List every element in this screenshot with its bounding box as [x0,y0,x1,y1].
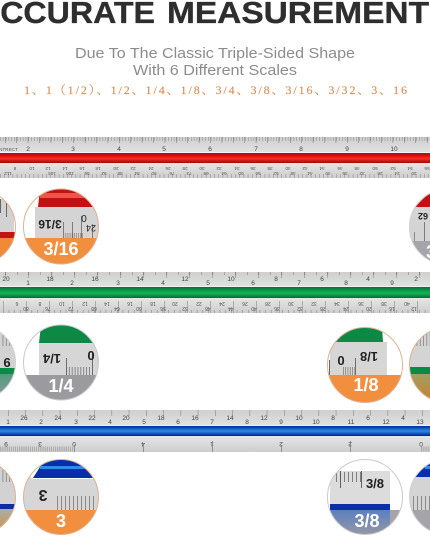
green ruler: 14 [136,276,144,283]
green ruler: 76 [45,305,51,311]
green ruler: 68 [91,305,97,311]
red ruler: 48 [354,166,360,171]
red ruler: 56 [424,166,430,171]
blue ruler: 1 [6,419,10,426]
green ruler: 28 [320,305,326,311]
blue ruler: 12 [382,419,390,426]
green ruler: 44 [228,305,234,311]
red ruler: 18 [95,166,101,171]
magnifier: 1/8 scale: 0 [337,353,345,368]
green ruler: 20 [366,305,372,311]
red ruler: 14 [62,166,68,171]
blue ruler: 6 [176,419,180,426]
red ruler: 104 [48,171,56,176]
green ruler: 20 [172,300,178,306]
red ruler: 44 [307,171,313,176]
red ruler: 16 [79,166,85,171]
red ruler: 10 [29,166,35,171]
magnifier: green partial left: 9 [3,355,11,370]
magnifier: 3/16 scale: 3/16 [38,217,62,231]
red ruler: 44 [319,166,325,171]
red ruler: 9 [345,146,349,153]
magnifier: green partial right [409,331,430,399]
green ruler: 7 [297,280,301,287]
red ruler: 56 [255,171,261,176]
green ruler: 18 [150,300,156,306]
magnifier: 3/16 scale [23,188,99,264]
magnifier: 1/8 scale: 1/8 [360,349,378,364]
red ruler: 38 [267,166,273,171]
red ruler: 54 [407,166,413,171]
red ruler: 42 [302,166,308,171]
red ruler: 68 [203,171,209,176]
red ruler: 32 [359,171,365,176]
title [0,0,429,30]
green ruler: 30 [288,300,294,306]
green ruler: 6 [251,280,255,287]
green ruler: 20 [2,276,10,283]
green ruler: 24 [219,300,225,306]
blue ruler: 0 [72,440,76,447]
green ruler: 16 [91,276,99,283]
red ruler: 26 [165,166,171,171]
green ruler: 12 [82,300,88,306]
blue ruler: 26 [20,415,28,422]
magnifier: 1/8 scale [325,325,405,405]
magnifier: 3/16 scale: 0 [81,212,87,223]
blue ruler: 9 [4,440,8,447]
blue ruler: 0 [419,440,423,447]
blue ruler: 22 [88,415,96,422]
red ruler: 12 [45,166,51,171]
blue ruler: 7 [210,419,214,426]
red ruler: 7 [254,146,258,153]
green ruler: 38 [381,300,387,306]
blue ruler: 8 [331,415,335,422]
red ruler: 40 [285,166,291,171]
green ruler: 14 [104,300,110,306]
red ruler: 52 [273,171,279,176]
red ruler: 4 [117,146,121,153]
red ruler: 46 [337,166,343,171]
blue ruler: 14 [226,415,234,422]
magnifier: 1/4 scale [23,324,99,400]
green ruler: 12 [181,276,189,283]
blue ruler: 3 [38,440,42,447]
green ruler: 10 [227,276,235,283]
magnifier: 3/8 scale [325,457,405,537]
magnifier: 3 scale [23,459,99,535]
red ruler: 30 [199,166,205,171]
red ruler: 28 [182,166,188,171]
blue ruler: 1 [210,440,214,447]
red ruler: 20 [411,171,417,176]
red ruler [0,137,430,178]
red ruler: 5 [162,146,166,153]
green ruler: 8 [274,276,278,283]
green ruler: 40 [251,305,257,311]
subtitle [75,46,355,79]
red ruler: 72 [186,171,192,176]
green ruler: 4 [161,280,165,287]
green ruler: 4 [366,276,370,283]
magnifier: 3/16 scale: 24 [86,223,96,233]
green ruler [0,272,430,313]
blue ruler: 10 [312,419,320,426]
scale list: 1、1（1/2）、1/2、1/4、1/8、3/4、3/8、3/16、3/32、3、16 [24,83,407,97]
green ruler: 72 [68,305,74,311]
red ruler: 84 [134,171,140,176]
magnifier: red partial right: 62 [418,211,428,221]
red ruler: 60 [238,171,244,176]
green ruler: 40 [404,300,410,306]
green ruler: 16 [389,305,395,311]
green ruler: 12 [411,305,417,311]
green ruler: 26 [242,300,248,306]
green ruler: 52 [182,305,188,311]
green ruler: 8 [344,280,348,287]
magnifier: 1/4 scale: 1/4 [48,376,74,396]
magnifier: red partial left [0,196,16,258]
green ruler: 10 [59,300,65,306]
green ruler: 36 [358,300,364,306]
green ruler: 24 [343,305,349,311]
green ruler: 18 [46,276,54,283]
green ruler: 60 [136,305,142,311]
magnifier: 3/8 scale: 3/8 [366,476,384,491]
green ruler: 8 [38,300,41,306]
magnifier: blue partial left [0,466,16,528]
red ruler: 24 [394,171,400,176]
green ruler: 6 [15,300,18,306]
blue ruler: 6 [366,415,370,422]
green ruler: 34 [334,300,340,306]
blue ruler: 2 [279,440,283,447]
magnifier: 1/4 scale: 1/4 [42,351,61,366]
red ruler: 8 [13,166,16,171]
red ruler: 80 [151,171,157,176]
blue ruler: 12 [260,415,268,422]
red ruler: 22 [130,166,136,171]
blue ruler: 24 [54,415,62,422]
green ruler: 3 [116,280,120,287]
red ruler: 8 [299,146,303,153]
red ruler: 88 [117,171,123,176]
red ruler: 48 [290,171,296,176]
green ruler: 16 [127,300,133,306]
red ruler: 52 [390,166,396,171]
magnifier: 3/16 scale: 3/16 [43,239,79,259]
red ruler: 76 [169,171,175,176]
magnifier: red partial right [409,193,430,261]
blue ruler: 11 [348,419,355,426]
green ruler: 32 [311,300,317,306]
magnifier: blue partial right [409,463,430,531]
blue ruler: 16 [191,415,199,422]
magnifier: green partial left [0,332,16,394]
green ruler: 32 [297,305,303,311]
blue ruler: 3 [74,419,78,426]
red ruler: 34 [234,166,240,171]
red ruler: 6 [208,146,212,153]
green ruler: 28 [265,300,271,306]
red ruler: 24 [148,166,154,171]
blue ruler: 9 [279,419,283,426]
blue ruler: 8 [245,419,249,426]
blue ruler: 13 [416,419,424,426]
green ruler: 22 [196,300,202,306]
red ruler: 50 [372,166,378,171]
blue ruler: 2 [348,440,352,447]
blue ruler: 18 [157,415,165,422]
blue ruler: 2 [39,419,43,426]
red ruler: 100 [66,171,74,176]
red ruler: 36 [342,171,348,176]
red ruler: 96 [84,171,90,176]
red ruler: 28 [377,171,383,176]
blue ruler: 10 [295,415,303,422]
magnifier: 1/8 scale: 1/8 [353,375,379,395]
red ruler: 10 [390,146,398,153]
blue ruler: 20 [122,415,130,422]
blue ruler: 4 [141,440,145,447]
blue ruler: 4 [108,419,112,426]
green ruler: 2 [70,280,74,287]
blue ruler: 4 [401,415,405,422]
green ruler: 2 [414,276,418,283]
green ruler: 36 [274,305,280,311]
red ruler: 92 [101,171,107,176]
red ruler: 112 [4,171,12,176]
green ruler: 6 [320,276,324,283]
green ruler: 64 [114,305,120,311]
red ruler: 36 [250,166,256,171]
green ruler: 1 [26,280,30,287]
blue ruler: 5 [142,419,146,426]
red ruler: 64 [221,171,227,176]
magnifier: 3 scale: 3 [38,486,47,503]
magnifier: 3 scale: 3 [56,511,66,531]
green ruler: 5 [206,280,210,287]
green ruler: 80 [23,305,29,311]
blue ruler [0,410,430,452]
red ruler: 32 [216,166,222,171]
green ruler: 56 [160,305,166,311]
red ruler: 40 [325,171,331,176]
green ruler: 9 [390,280,394,287]
subtitle: Due To The Classic Triple-Sided Shape [75,46,355,62]
red ruler: 3 [71,146,75,153]
subtitle: With 6 Different Scales [133,63,297,79]
red ruler: 2 [26,146,30,153]
magnifier: 3/8 scale: 3/8 [354,511,380,531]
green ruler: 48 [205,305,211,311]
red ruler: 20 [113,166,119,171]
magnifier: 1/4 scale: 0 [87,348,95,363]
